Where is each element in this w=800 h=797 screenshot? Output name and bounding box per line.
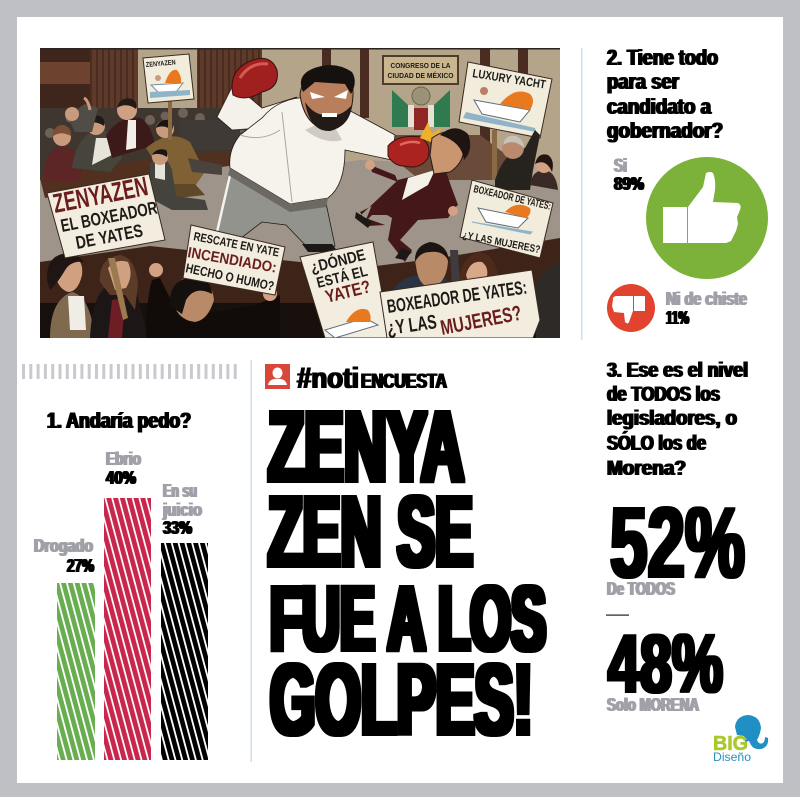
stat: 48% solo morena: Solo MORENA (607, 695, 699, 715)
bar: en su juicio: En su (163, 481, 197, 501)
label: ni de chiste 11% (666, 289, 747, 328)
sign: donde esta el yate (300, 242, 390, 338)
headline: FUE A LOS (270, 568, 546, 670)
man being hit (355, 128, 470, 262)
logo: big diseno: BIG (713, 733, 748, 755)
hashtag (297, 362, 447, 395)
sign: donde esta el yate: ¿DÓNDE (308, 245, 368, 277)
sign: rescate en yate incendiado: RESCATE EN YATE (192, 229, 281, 260)
raised glove (232, 58, 277, 98)
label: si 89% (614, 156, 644, 194)
icon: elephant (735, 715, 768, 749)
bar: drogado: Drogado (34, 536, 93, 556)
congress plaque: CIUDAD DE MÉXICO (388, 71, 454, 80)
sign: donde esta el yate: ESTÁ EL (315, 263, 369, 292)
question 2 heading: gobernador? (607, 118, 723, 143)
question 3 heading: 3. Ese es el nivel (607, 359, 748, 382)
sign: boxeador de yates (460, 180, 553, 258)
question 2 heading: candidato a (607, 94, 712, 119)
icon: thumbs up (646, 157, 768, 279)
icon: user badge (265, 364, 290, 389)
illustration: boxer in congress (40, 48, 560, 340)
stat: 48% solo morena: 48% (608, 617, 723, 710)
small sign: zenyazen: ZENYAZEN (146, 59, 176, 69)
headline: GOLPES! (270, 644, 533, 756)
hashtag: ENCUESTA (361, 370, 447, 393)
label: si 89%: 89% (614, 174, 644, 194)
sign: donde esta el yate: YATE? (323, 276, 373, 307)
banner: boxeador de yates: BOXEADOR DE YATES: (386, 278, 528, 318)
question 3 heading: legisladores, o (607, 407, 737, 430)
stat: 48% solo morena (607, 617, 723, 715)
people right (495, 130, 558, 190)
question 2 heading (607, 45, 723, 143)
bar: drogado: 27% (67, 556, 94, 576)
question 3 heading: SÓLO los de (607, 431, 706, 455)
question 3 heading (607, 359, 748, 480)
bar: en su juicio: 33% (163, 518, 192, 538)
icon: thumbs down (607, 284, 655, 332)
sign: zenyazen el boxeador de yates (47, 171, 165, 258)
label: ni de chiste 11%: 11% (666, 308, 689, 328)
punching glove (388, 122, 441, 167)
logo: big diseno: Diseño (713, 750, 751, 764)
sign: zenyazen el boxeador de yates: DE YATES (74, 220, 145, 253)
sign: rescate en yate incendiado (183, 225, 285, 295)
question 2 heading: para ser (607, 69, 679, 94)
tick strip (22, 364, 237, 379)
sign: zenyazen el boxeador de yates: EL BOXEADOR (59, 198, 159, 236)
headline (268, 391, 546, 756)
logo: big diseno (713, 715, 768, 764)
sign: zenyazen el boxeador de yates: ZENYAZEN (50, 171, 150, 219)
label: ni de chiste 11%: Ni de chiste (666, 289, 747, 309)
distant audience (45, 108, 245, 138)
headline: ZEN SE (268, 476, 473, 588)
banner: boxeador de yates: MUJERES? (439, 302, 523, 340)
flags and crest (392, 87, 450, 130)
sign: rescate en yate incendiado: HECHO O HUMO? (184, 260, 276, 294)
stat: 52% de todos (607, 487, 745, 599)
sign: luxury yacht: LUXURY YACHT (472, 66, 547, 92)
bar: ebrio: 40% (106, 468, 136, 488)
boxer (212, 58, 441, 254)
sign: rescate en yate incendiado: INCENDIADO: (186, 244, 278, 277)
question 1 heading: 1. Andaría pedo? (47, 408, 191, 433)
bar: en su juicio: juicio (162, 500, 202, 520)
banner: boxeador de yates: ¿Y LAS (386, 311, 438, 340)
headline: ZENYA (268, 391, 464, 503)
sign: boxeador de yates: BOXEADOR DE YATES: (472, 183, 552, 213)
question 3 heading: Morena? (607, 457, 686, 480)
label: si 89%: Si (614, 156, 627, 177)
people bottom left (47, 254, 280, 338)
crowd on the left (44, 98, 222, 210)
small sign: zenyazen (143, 54, 194, 140)
banner: boxeador de yates (380, 270, 540, 340)
congress plaque (383, 56, 458, 84)
sign: luxury yacht (459, 62, 552, 180)
people bottom right (390, 242, 560, 338)
question 2 heading: 2. Tiene todo (607, 45, 718, 70)
bar: en su juicio (161, 481, 208, 760)
question 3 heading: de TODOS los (607, 383, 720, 406)
stat: 52% de todos: De TODOS (607, 579, 675, 599)
hashtag: #noti (297, 362, 359, 395)
congress plaque: CONGRESO DE LA (390, 61, 451, 70)
bar: ebrio (104, 449, 151, 760)
bar chart (34, 449, 208, 760)
bar: ebrio: Ebrio (106, 449, 141, 469)
sign: boxeador de yates: ¿Y LAS MUJERES? (461, 229, 541, 256)
bar: drogado (34, 536, 95, 760)
